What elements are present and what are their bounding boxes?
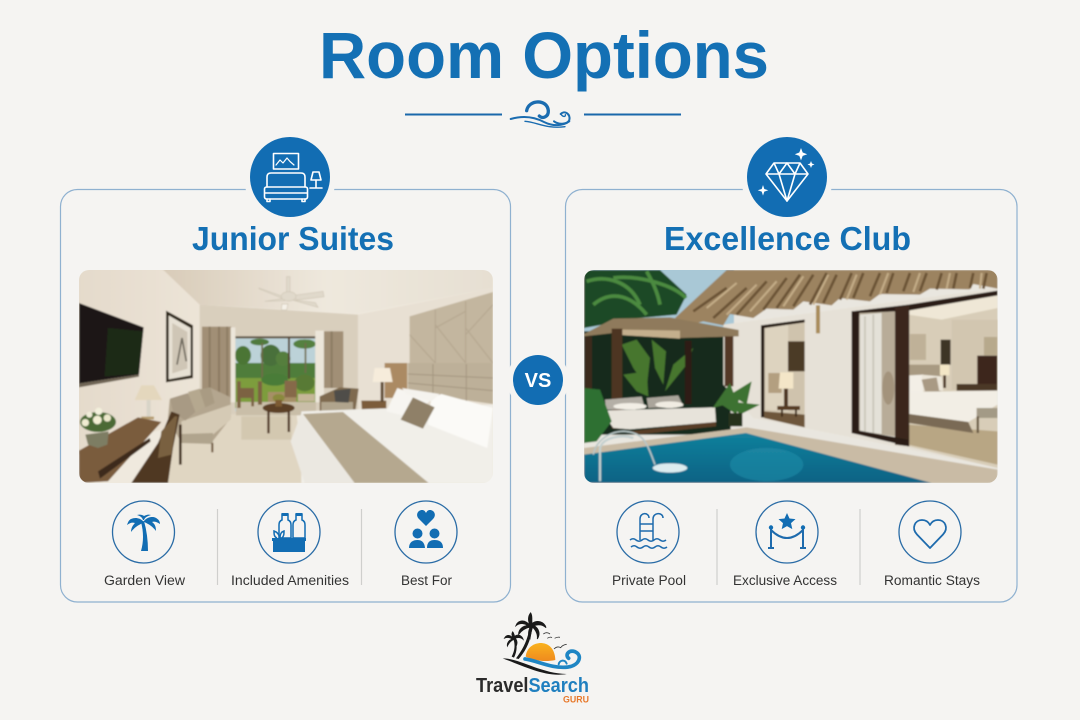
photo: junior suite room — [78, 268, 498, 488]
pillows — [388, 387, 430, 410]
wordmark: TravelSearch — [476, 675, 589, 697]
icon: heart — [914, 520, 946, 548]
label: Romantic Stays — [884, 573, 980, 588]
bed in room — [909, 375, 923, 393]
feature: Exclusive Access — [733, 501, 837, 588]
round table — [263, 403, 295, 413]
icon: pool ladder — [630, 514, 667, 548]
sliding door frames — [852, 291, 998, 317]
wall art — [166, 311, 193, 382]
icon: palm tree — [127, 515, 160, 551]
daybed — [630, 421, 716, 435]
heading: Junior Suites: Junior Suites — [192, 220, 394, 257]
sun — [526, 643, 555, 661]
small door — [762, 322, 806, 418]
sub-wordmark: GURU — [563, 694, 589, 706]
feature: Romantic Stays — [884, 501, 980, 588]
window — [235, 336, 315, 411]
bed — [301, 405, 493, 483]
potted plant and left foliage — [713, 381, 760, 415]
label: Included Amenities — [231, 573, 349, 588]
desk — [79, 417, 161, 483]
feature: Garden View — [104, 501, 185, 588]
big glass door room — [908, 292, 998, 468]
label: Private Pool — [612, 573, 686, 588]
icon: diamond badge — [747, 137, 827, 217]
title: Room Options — [319, 18, 769, 92]
ceiling fan — [259, 277, 324, 310]
label: Best For — [401, 573, 453, 588]
ground — [503, 658, 567, 675]
feature: Private Pool — [612, 501, 686, 588]
floor — [168, 412, 305, 483]
logo: TravelSearch Guru — [476, 613, 589, 706]
balcony chairs — [237, 381, 315, 408]
TV — [79, 303, 144, 384]
desk lamp — [135, 385, 162, 400]
headboard and panel — [410, 292, 493, 363]
icon: bed and lamp badge — [250, 137, 330, 217]
sky and jungle — [584, 268, 734, 335]
thatched roof — [675, 270, 998, 325]
title divider with wave ornament — [405, 102, 681, 127]
feature: Included Amenities — [231, 501, 349, 588]
banana leaves — [622, 340, 693, 396]
flowers — [85, 431, 109, 448]
feature: Best For — [395, 501, 457, 588]
palm trees — [504, 613, 546, 659]
heading: Excellence Club: Excellence Club — [664, 220, 911, 257]
white wall — [722, 291, 988, 444]
wall sconce — [816, 305, 820, 333]
panel: Excellence Club — [566, 131, 1017, 602]
label: Garden View — [104, 573, 185, 588]
photo: villa with private pool — [580, 268, 1000, 488]
VS badge: VS — [525, 370, 551, 392]
pool — [584, 433, 932, 483]
pool deck — [584, 427, 998, 483]
birds — [543, 633, 567, 649]
chair — [131, 411, 180, 483]
pool ladder and water — [593, 431, 655, 465]
cabana — [584, 317, 739, 338]
nightstand and bedside lamp — [361, 401, 386, 411]
armchair — [320, 387, 359, 412]
icon: couple with heart — [409, 510, 443, 548]
icon: star and velvet rope — [768, 513, 806, 548]
wave — [525, 651, 579, 667]
label: Exclusive Access — [733, 573, 837, 588]
sofa — [168, 387, 231, 443]
panel: Junior Suites — [60, 131, 510, 602]
icon: amenity bottles in tray — [272, 513, 306, 552]
curtains — [202, 327, 231, 398]
VS badge — [507, 349, 569, 411]
